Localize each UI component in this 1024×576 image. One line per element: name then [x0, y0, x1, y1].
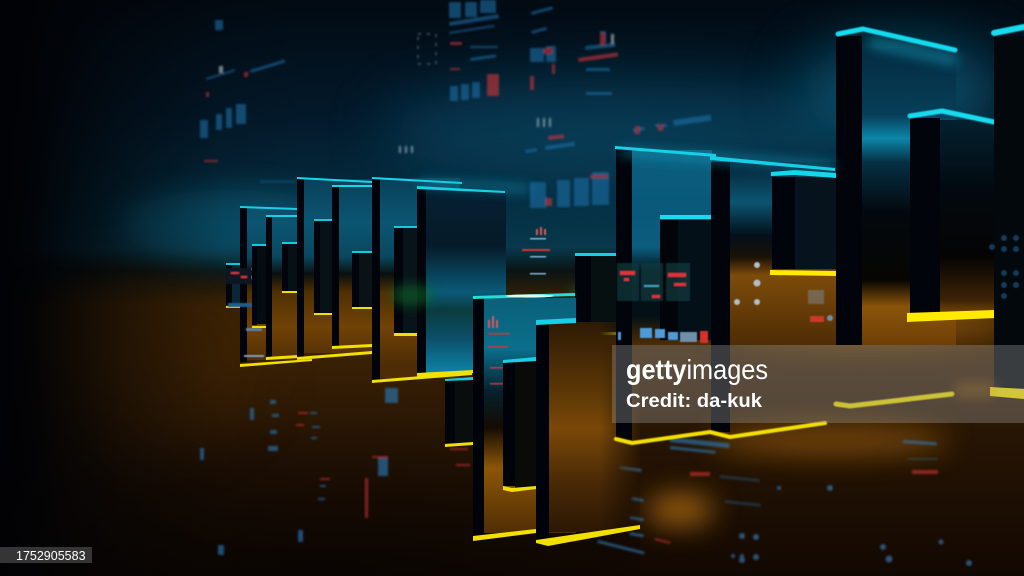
block: left tall B [240, 206, 312, 367]
block: E [332, 185, 372, 349]
block: N [615, 146, 716, 440]
HUD marks on P [734, 262, 833, 322]
block: Q [770, 170, 837, 276]
block: M small [575, 253, 616, 335]
middle group of blocks [372, 177, 640, 546]
yellow floor lines [616, 383, 995, 443]
block: R tall [836, 29, 956, 345]
HUD panels on N [617, 262, 722, 343]
block: P [710, 156, 836, 432]
block: small B2 [252, 244, 266, 328]
image ID tag [0, 547, 92, 563]
block: small E2 [352, 251, 372, 309]
block: F [372, 177, 472, 383]
block: J [503, 357, 536, 492]
block: L small [445, 377, 473, 447]
HUD panels top [200, 0, 711, 208]
block: K [536, 318, 640, 546]
block: small O [660, 215, 712, 340]
HUD reflections lower [200, 388, 972, 566]
block: small D2 [314, 219, 332, 315]
block: small F2 [394, 226, 417, 336]
right group of blocks [615, 27, 1024, 443]
watermark credit: Credit: da-kuk [626, 391, 762, 412]
image ID number: 1752905583 [16, 549, 86, 563]
block: S [907, 111, 995, 322]
far left group of blocks [226, 177, 372, 367]
block: C [266, 215, 298, 360]
block: T far right [989, 27, 1024, 399]
block: D [297, 177, 372, 360]
glow: green flare [390, 284, 624, 306]
watermark logo: gettyimages: gettyimages [626, 354, 768, 385]
block: I [473, 293, 576, 541]
cyan edge glow [420, 38, 958, 192]
block: HUD panel on B [226, 268, 264, 357]
HUD marks on I [488, 227, 550, 384]
watermark band [612, 345, 1024, 423]
block: small C2 [282, 242, 298, 293]
block: G central glass [417, 186, 506, 377]
block: small far [226, 263, 242, 308]
